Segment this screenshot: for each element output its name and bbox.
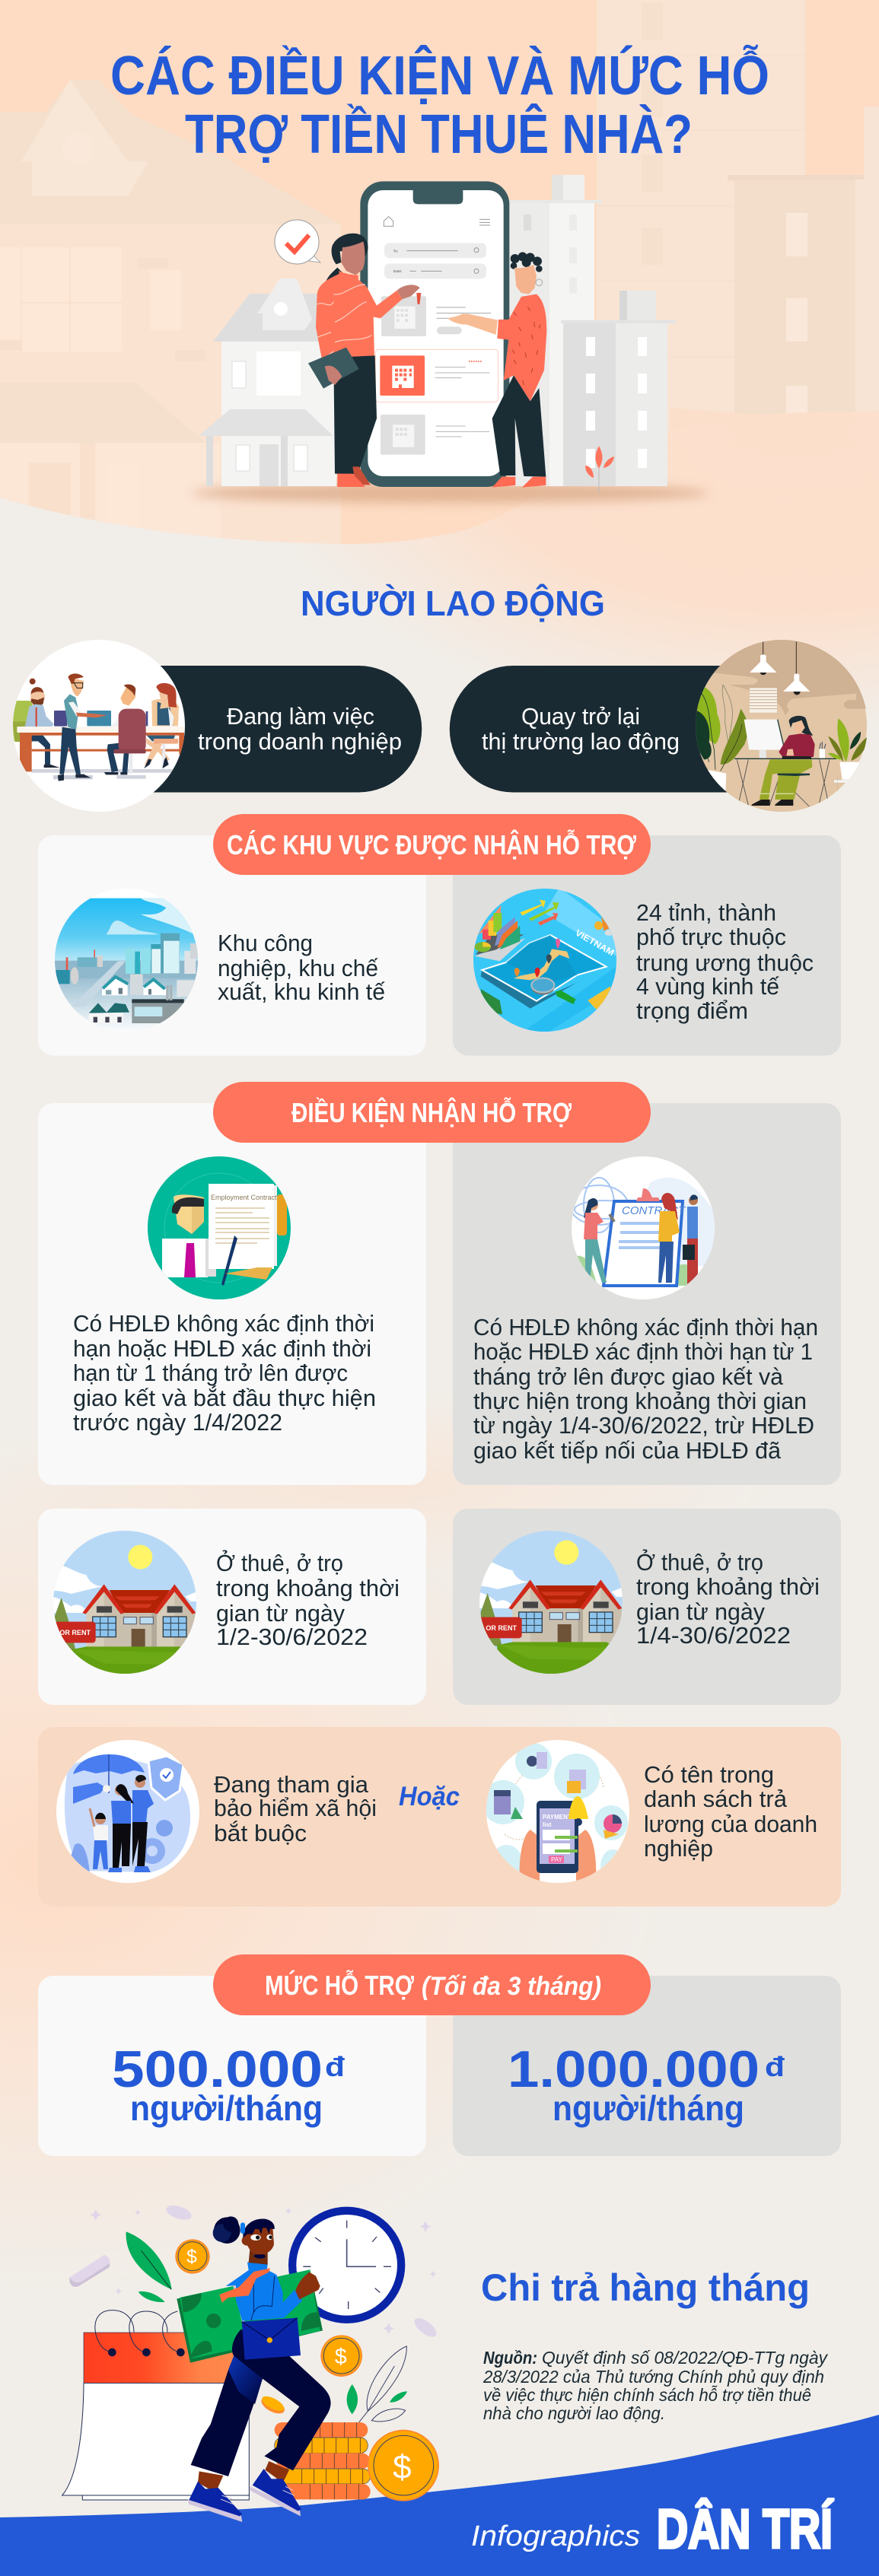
text: 24 tỉnh, thành phố: phố trực thuộc (636, 924, 786, 950)
text: ở thuê từ 1/4: Ở thuê, ở trọ (636, 1548, 763, 1576)
amount: 500.000đ: người/tháng (130, 2088, 323, 2128)
icon: house for rent right: OR RENT (486, 1624, 518, 1632)
icon: dollar coins: $ (186, 2247, 197, 2267)
text: đang làm việc (198, 703, 402, 755)
header background with faded houses and buildings (0, 0, 879, 548)
figure: woman holding key (308, 234, 421, 487)
icon: house for rent (53, 1531, 196, 1674)
pill heading: các khu vực: CÁC KHU VỰC ĐƯỢC NHẬN HỖ TRỢ (227, 828, 636, 860)
text: điều kiện bên trái: giao kết và bắt đầu thực hiện (73, 1385, 376, 1411)
text: ở thuê từ 1/4: trong khoảng thời (636, 1573, 820, 1600)
icon: dollar coins (175, 2239, 439, 2501)
pill heading: điều kiện nhận hỗ trợ: ĐIỀU KIỆN NHẬN HỖ TRỢ (291, 1096, 572, 1128)
text: 24 tỉnh, thành phố (636, 899, 814, 1024)
source note (482, 2348, 828, 2423)
text: điều kiện bên trái: trước ngày 1/4/2022 (73, 1409, 282, 1436)
icon: employment contract (148, 1156, 291, 1299)
text: khu công nghiệp: xuất, khu kinh tế (218, 978, 385, 1005)
text: bảo hiểm: bảo hiểm xã hội (214, 1795, 377, 1821)
icon: smartphone (360, 181, 509, 487)
source note: nhà cho người lao động. (483, 2403, 665, 2423)
text: điều kiện bên phải: tháng trở lên được giao kết và (473, 1363, 784, 1390)
panel: quay trở lại (450, 635, 871, 812)
icon: payroll phone: list (543, 1821, 552, 1828)
icon: smartphone: To: (393, 249, 398, 253)
icon: woman at home desk (689, 635, 871, 812)
panel: condition left card (38, 1103, 426, 1485)
figure: woman carrying banknote (177, 2216, 331, 2522)
text: khu công nghiệp: nghiệp, khu chế (218, 955, 378, 981)
amount: 500.000đ: 500.000 (112, 2040, 323, 2098)
amount: 500.000đ: đ (325, 2051, 345, 2082)
text: quay trở lại: thị trường lao động (482, 728, 680, 755)
logo: Infographics Dân Trí: DÂN TRÍ (657, 2498, 834, 2560)
text: điều kiện bên phải: Có HĐLĐ không xác định thời hạn (473, 1314, 818, 1340)
panel: đang làm việc (13, 640, 422, 812)
icon: leaves (126, 2231, 407, 2422)
icon: dollar coins: $ (335, 2345, 347, 2369)
icon: dollar coins: $ (393, 2448, 412, 2485)
icon: employment contract: Employment Contract (211, 1194, 277, 1201)
text: ở thuê từ 1/2: Ở thuê, ở trọ (216, 1549, 343, 1576)
illustration: renting a home through a phone app (192, 175, 709, 503)
icon: people signing contract (570, 1156, 715, 1299)
heading: Người lao động: NGƯỜI LAO ĐỘNG (301, 584, 605, 623)
text: điều kiện bên phải (473, 1314, 818, 1464)
icon: background buildings (506, 175, 676, 495)
text: danh sách trả lương: lương của doanh (644, 1811, 817, 1837)
text: ở thuê từ 1/4 (636, 1548, 820, 1649)
title: CÁC ĐIỀU KIỆN VÀ MỨC HỖ (110, 44, 769, 107)
panel: amount left card (38, 1976, 426, 2156)
pill heading: các khu vực (213, 814, 651, 875)
icon: background house (199, 278, 336, 486)
text: bảo hiểm (214, 1771, 377, 1846)
amount: 1.000.000đ: người/tháng (553, 2088, 744, 2128)
text: danh sách trả lương: Có tên trong (644, 1761, 774, 1788)
icon: payroll phone: PAY (551, 1856, 562, 1863)
icon: coin stack (259, 2393, 371, 2499)
text: khu công nghiệp (218, 930, 385, 1005)
panel: insurance or payroll (38, 1727, 841, 1907)
text: 24 tỉnh, thành phố: 4 vùng kinh tế (636, 973, 779, 1000)
text: đang làm việc: Đang làm việc (227, 703, 374, 730)
icon: insured family (56, 1740, 199, 1883)
icon: Vietnam map (473, 888, 620, 1035)
icon: payroll phone: PAYMENT (543, 1814, 572, 1821)
figure: man gesturing (447, 252, 546, 488)
pill heading: mức hỗ trợ (213, 1954, 651, 2015)
text: ở thuê từ 1/4: 1/4-30/6/2022 (636, 1622, 791, 1649)
icon: coworkers at a table (13, 640, 185, 812)
panel: rent dates right card (453, 1509, 841, 1705)
text: 24 tỉnh, thành phố: trọng điểm (636, 997, 748, 1024)
source note: Quyết định số 08/2022/QĐ-TTg ngày (542, 2348, 828, 2368)
text: danh sách trả lương: nghiệp (644, 1835, 713, 1862)
text: ở thuê từ 1/2: gian từ ngày (216, 1600, 345, 1627)
heading: chi trả hàng tháng: Chi trả hàng tháng (481, 2266, 810, 2309)
source note: về việc thực hiện chính sách hỗ trợ tiền thuê (483, 2384, 811, 2405)
icon: house for rent right (479, 1531, 623, 1674)
text: điều kiện bên trái: hạn từ 1 tháng trở lên được (73, 1360, 348, 1386)
text: điều kiện bên trái: hạn hoặc HĐLĐ xác định thời (73, 1335, 371, 1362)
text: đang làm việc: trong doanh nghiệp (198, 728, 402, 755)
text: bảo hiểm: bắt buộc (214, 1820, 307, 1846)
footer band (0, 2415, 879, 2576)
amount: 1.000.000đ: 1.000.000 (508, 2040, 760, 2098)
illustration: woman with money, clock and calendar (62, 2202, 440, 2522)
icon: speech bubble with check mark (275, 220, 320, 264)
amount: 1.000.000đ: đ (765, 2051, 785, 2082)
text: điều kiện bên phải: thực hiện trong khoảng thời gian (473, 1388, 807, 1414)
text: điều kiện bên phải: giao kết tiếp nối của HĐLĐ đã (473, 1437, 782, 1464)
text: ở thuê từ 1/4: gian từ ngày (636, 1598, 765, 1625)
panel: amount right card (453, 1976, 841, 2156)
logo: Infographics Dân Trí: Infographics (471, 2520, 640, 2552)
icon: house for rent: OR RENT (59, 1629, 91, 1636)
panel: condition right card (453, 1103, 841, 1485)
text: khu công nghiệp: Khu công (218, 930, 313, 956)
text: điều kiện bên phải: hoặc HĐLĐ xác định thời hạn từ 1 (473, 1338, 813, 1365)
amount: 1.000.000đ (508, 2040, 785, 2128)
amount: 500.000đ (112, 2040, 345, 2128)
text: quay trở lại (482, 703, 680, 755)
source note: 28/3/2022 của Thủ tướng Chính phủ quy định (482, 2367, 824, 2387)
text: 24 tỉnh, thành phố: 24 tỉnh, thành (636, 899, 776, 926)
text: điều kiện bên trái: Có HĐLĐ không xác định thời (73, 1310, 374, 1337)
icon: clock (288, 2207, 405, 2323)
text: ở thuê từ 1/2: trong khoảng thời (216, 1575, 400, 1601)
logo: Infographics Dân Trí (471, 2498, 834, 2560)
icon: smartphone: Date: (393, 269, 403, 274)
text: quay trở lại: Quay trở lại (521, 703, 640, 730)
text: điều kiện bên phải: từ ngày 1/4-30/6/2022, trừ HĐLĐ (473, 1412, 814, 1439)
icon: sparkles and pebbles (69, 2202, 440, 2340)
text: ở thuê từ 1/2: 1/2-30/6/2022 (216, 1624, 368, 1650)
text: danh sách trả lương: danh sách trả (644, 1786, 788, 1812)
icon: people signing contract: CONTRACT (622, 1204, 686, 1217)
icon: Vietnam map: VIETNAM (573, 928, 616, 958)
icon: payroll phone (482, 1740, 629, 1883)
text: điều kiện bên trái (73, 1310, 376, 1436)
text: 24 tỉnh, thành phố: trung ương thuộc (636, 949, 814, 976)
panel: area right card (453, 835, 841, 1056)
title (110, 44, 769, 165)
pill heading: mức hỗ trợ: (Tối đa 3 tháng) (422, 1972, 601, 2001)
label: hoặc: Hoặc (399, 1782, 460, 1811)
title: TRỢ TIỀN THUÊ NHÀ? (185, 103, 693, 165)
pill heading: điều kiện nhận hỗ trợ (213, 1082, 651, 1143)
text: ở thuê từ 1/2 (216, 1549, 400, 1650)
icon: calendar (62, 2310, 249, 2500)
source note: Nguồn: (483, 2348, 537, 2368)
pill heading: mức hỗ trợ: MỨC HỖ TRỢ (265, 1969, 414, 2001)
panel: rent dates left card (38, 1509, 426, 1705)
icon: industrial city (55, 898, 198, 1026)
panel: area left card (38, 835, 426, 1056)
text: danh sách trả lương (644, 1761, 817, 1862)
text: bảo hiểm: Đang tham gia (214, 1771, 369, 1798)
